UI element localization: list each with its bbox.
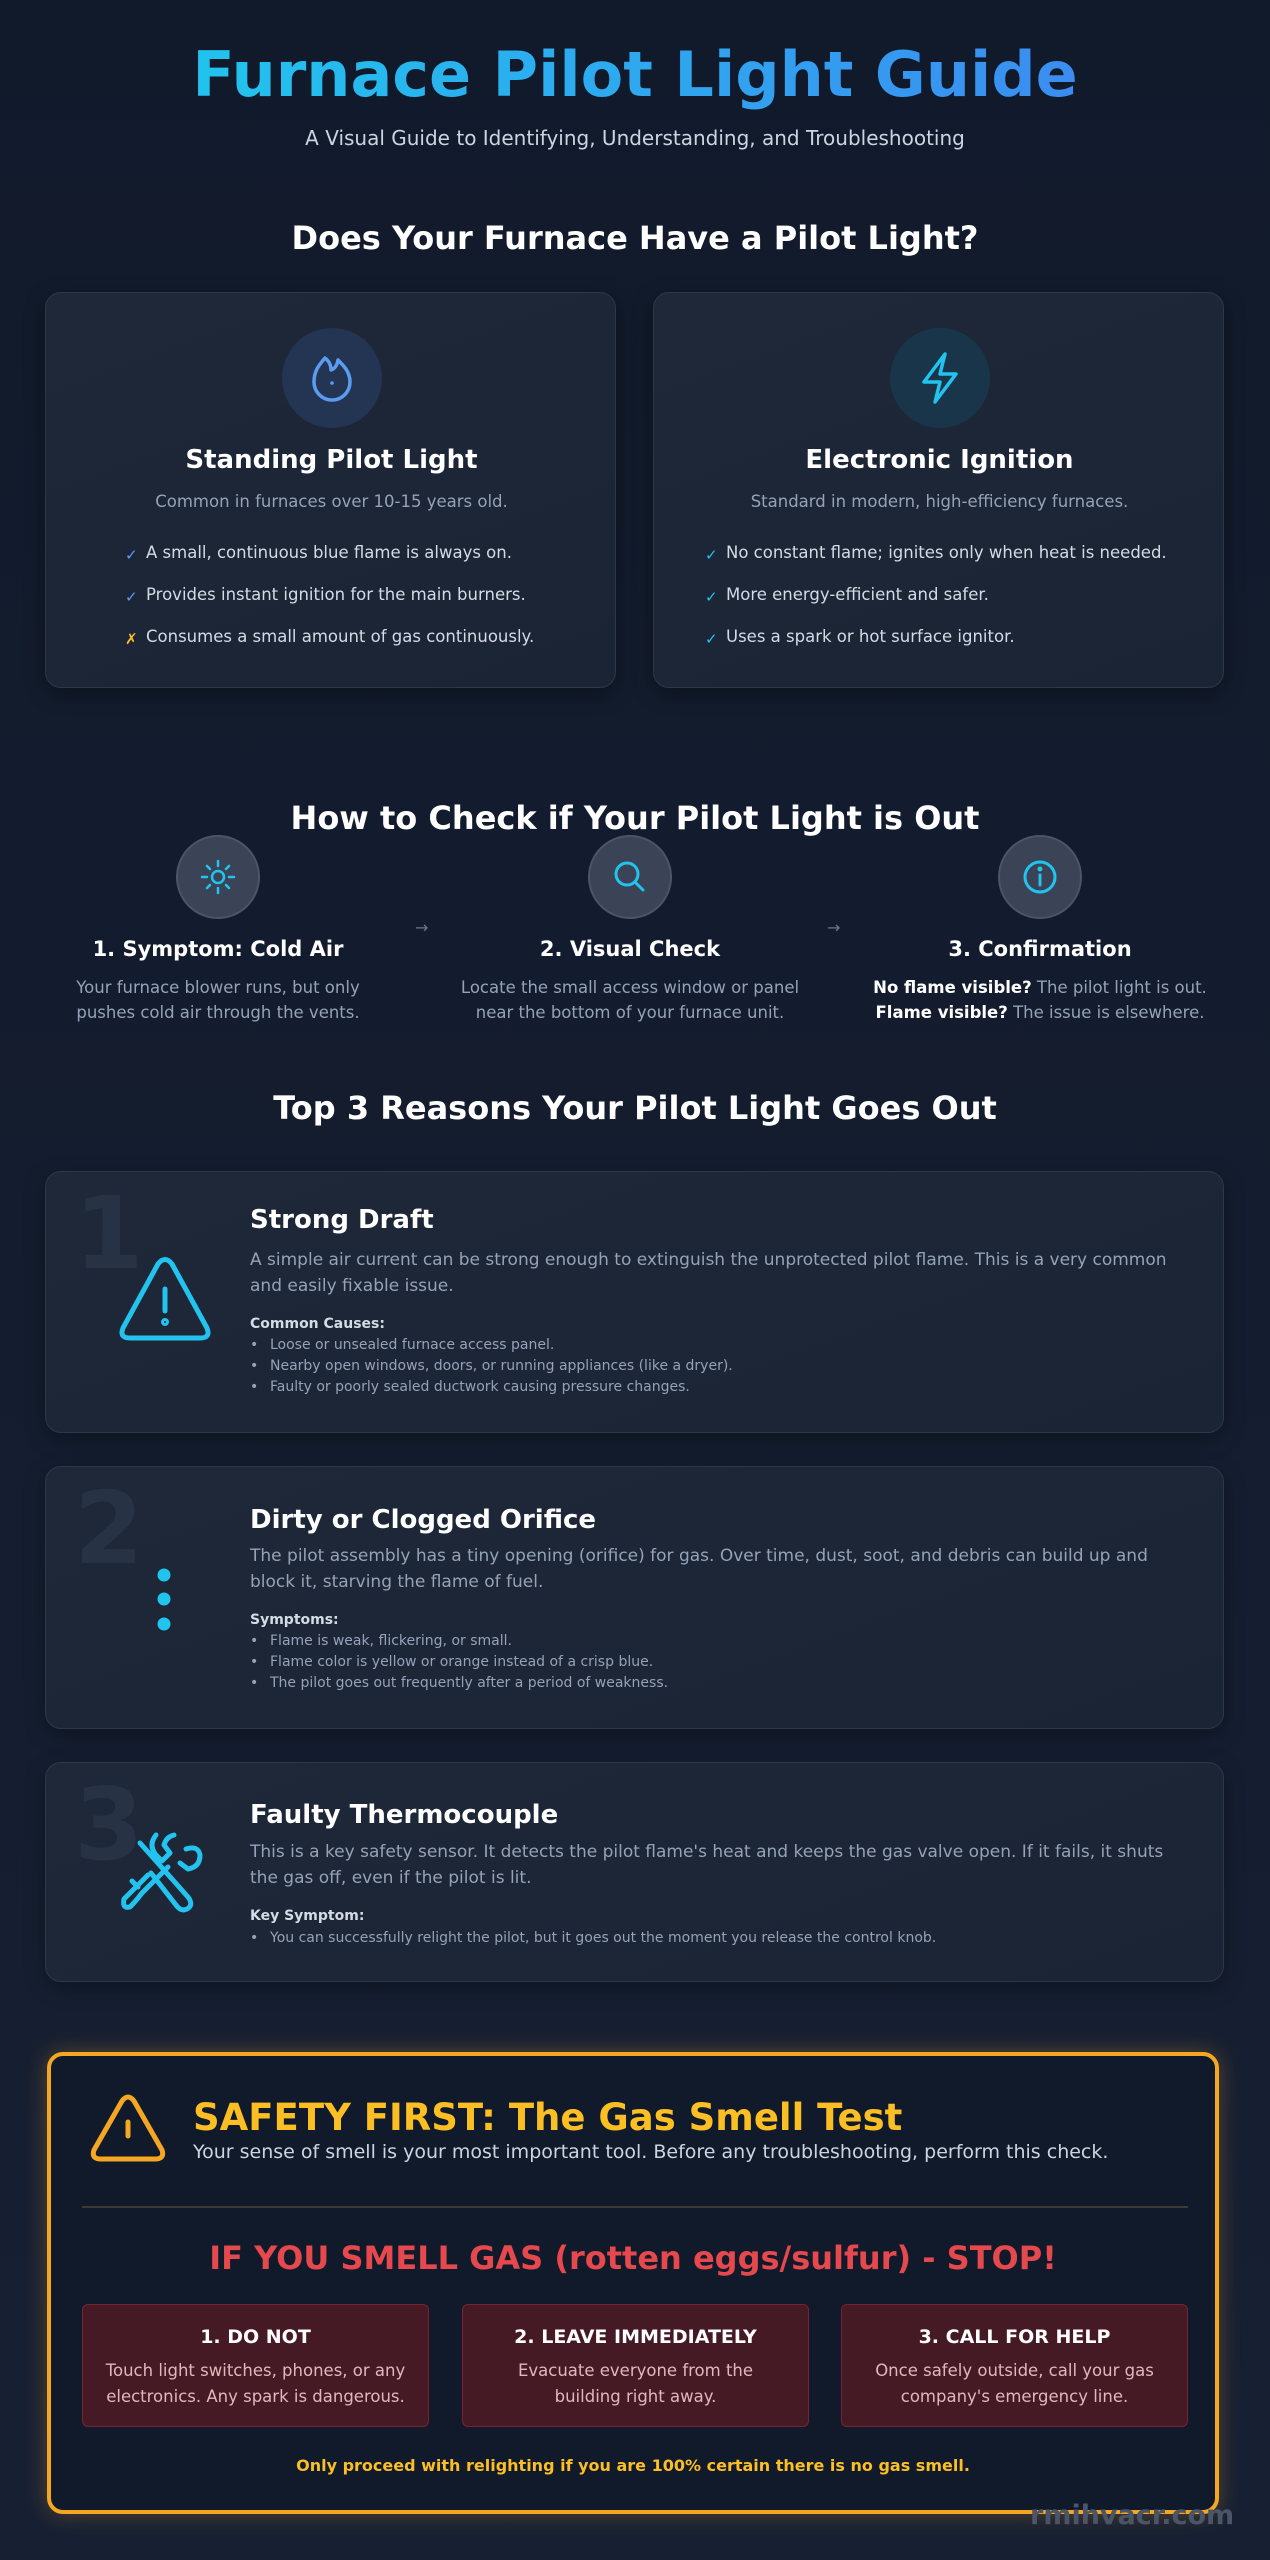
- warning heading: IF YOU SMELL GAS (rotten eggs/sulfur) - STOP!: [209, 2239, 1057, 2277]
- step desc: near the bottom of your furnace unit.: [476, 1003, 784, 1022]
- step title: 2. Visual Check: [540, 937, 720, 961]
- icon: info: [998, 835, 1082, 919]
- box: do not: electronics. Any spark is dangerous.: [106, 2387, 405, 2406]
- reason desc: A simple air current can be strong enough to extinguish the unprotected pilot flame. This is a very common and easily fixable issue.: [250, 1250, 1167, 1296]
- reason desc: This is a key safety sensor. It detects the pilot flame's heat and keeps the gas valve open. If it fails, it shuts the gas off, even if the pilot is lit.: [250, 1842, 1163, 1888]
- box: leave: building right away.: [555, 2387, 716, 2406]
- reason title: Dirty or Clogged Orifice: [250, 1505, 596, 1535]
- step desc: [461, 978, 799, 1022]
- panel: reason 3: [45, 1762, 1224, 1982]
- icon: lightning: [890, 328, 990, 428]
- heading: does your furnace: Does Your Furnace Have a Pilot Light?: [292, 219, 978, 257]
- box: call: [841, 2304, 1188, 2427]
- icon: magnifier: [588, 835, 672, 919]
- panel: electronic ignition: ✓: [705, 588, 718, 606]
- reason title: Strong Draft: [250, 1205, 434, 1235]
- step desc: Your furnace blower runs, but only: [76, 978, 360, 997]
- panel: reason 1: Loose or unsealed furnace access panel.: [270, 1337, 554, 1353]
- panel: reason 2: Flame is weak, flickering, or small.: [270, 1633, 512, 1649]
- panel: reason 2: [45, 1466, 1224, 1729]
- panel: electronic ignition: [653, 292, 1224, 688]
- icon: tools: [121, 1832, 202, 1912]
- step desc: [873, 978, 1207, 1022]
- card subtitle: Common in furnaces over 10-15 years old.: [155, 492, 508, 511]
- step desc: pushes cold air through the vents.: [76, 1003, 360, 1022]
- note: Only proceed with relighting if you are 100% certain there is no gas smell.: [296, 2456, 970, 2475]
- step 3: [873, 835, 1207, 1022]
- list: [705, 543, 1167, 648]
- step desc: [76, 978, 360, 1022]
- panel: standing pilot light: ✓: [125, 588, 138, 606]
- step 1: [76, 835, 360, 1022]
- box: leave: 2. LEAVE IMMEDIATELY: [514, 2326, 757, 2348]
- icon: flame: [282, 328, 382, 428]
- big number 1: 1: [74, 1175, 144, 1292]
- icon: dots: [158, 1568, 170, 1630]
- list: Consumes a small amount of gas continuously.: [146, 627, 534, 646]
- panel: electronic ignition: ✓: [705, 630, 718, 648]
- box: do not: Touch light switches, phones, or any: [106, 2361, 405, 2380]
- box: call: 3. CALL FOR HELP: [919, 2326, 1110, 2348]
- step title: 3. Confirmation: [948, 937, 1132, 961]
- panel: safety first: [47, 2052, 1219, 2514]
- list: Uses a spark or hot surface ignitor.: [726, 627, 1015, 646]
- card title: Standing Pilot Light: [185, 445, 478, 475]
- panel: reason 3: You can successfully relight the pilot, but it goes out the moment you release the control knob.: [270, 1930, 936, 1946]
- box: leave: [462, 2304, 809, 2427]
- reason desc: The pilot assembly has a tiny opening (orifice) for gas. Over time, dust, soot, and debris can build up and block it, starving the flame of fuel.: [250, 1546, 1148, 1592]
- list: Provides instant ignition for the main burners.: [146, 585, 526, 604]
- subtitle: A Visual Guide to Identifying, Understanding, and Troubleshooting: [305, 126, 965, 150]
- list: [125, 543, 534, 648]
- step 2: [461, 835, 799, 1022]
- card subtitle: Standard in modern, high-efficiency furnaces.: [751, 492, 1128, 511]
- big number 3: 3: [74, 1766, 144, 1883]
- symptoms list: Symptoms:: [250, 1612, 339, 1628]
- step desc: No flame visible? The pilot light is out.: [873, 978, 1207, 997]
- step desc: Locate the small access window or panel: [461, 978, 799, 997]
- list: A small, continuous blue flame is always on.: [146, 543, 512, 562]
- panel: reason 1: Nearby open windows, doors, or running appliances (like a dryer).: [270, 1358, 733, 1374]
- box: call: company's emergency line.: [901, 2387, 1128, 2406]
- panel: reason 2: The pilot goes out frequently after a period of weakness.: [270, 1675, 668, 1691]
- panel: reason 2: Flame color is yellow or orange instead of a crisp blue.: [270, 1654, 653, 1670]
- box: do not: [82, 2304, 429, 2427]
- title: Furnace Pilot Light Guide: [192, 38, 1078, 111]
- panel: standing pilot light: ✗: [125, 630, 138, 648]
- safety subtitle: Your sense of smell is your most important tool. Before any troubleshooting, perform this check.: [193, 2141, 1108, 2163]
- icon: warning triangle: [90, 2094, 166, 2162]
- arrow 1: →: [415, 918, 428, 937]
- reason title: Faulty Thermocouple: [250, 1800, 558, 1830]
- panel: standing pilot light: [45, 292, 616, 688]
- panel: reason 1: Faulty or poorly sealed ductwork causing pressure changes.: [270, 1379, 690, 1395]
- panel: standing pilot light: ✓: [125, 546, 138, 564]
- list: No constant flame; ignites only when heat is needed.: [726, 543, 1167, 562]
- box: do not: 1. DO NOT: [200, 2326, 311, 2348]
- heading: top 3 reasons: Top 3 Reasons Your Pilot Light Goes Out: [273, 1089, 997, 1127]
- list: More energy-efficient and safer.: [726, 585, 989, 604]
- heading: how to check: How to Check if Your Pilot Light is Out: [291, 799, 979, 837]
- panel: electronic ignition: ✓: [705, 546, 718, 564]
- arrow 2: →: [827, 918, 840, 937]
- box: leave: Evacuate everyone from the: [518, 2361, 753, 2380]
- causes list: Common Causes:: [250, 1316, 385, 1332]
- big number 2: 2: [74, 1470, 144, 1587]
- watermark: rmihvacr.com: [1030, 2500, 1234, 2531]
- card title: Electronic Ignition: [805, 445, 1074, 475]
- step title: 1. Symptom: Cold Air: [93, 937, 343, 961]
- panel: reason 1: [45, 1171, 1224, 1433]
- box: call: Once safely outside, call your gas: [875, 2361, 1154, 2380]
- safety title: SAFETY FIRST: The Gas Smell Test: [193, 2096, 902, 2139]
- icon: sun: [176, 835, 260, 919]
- key symptom: Key Symptom:: [250, 1908, 364, 1924]
- icon: warning triangle: [119, 1257, 211, 1340]
- step desc: Flame visible? The issue is elsewhere.: [876, 1003, 1204, 1022]
